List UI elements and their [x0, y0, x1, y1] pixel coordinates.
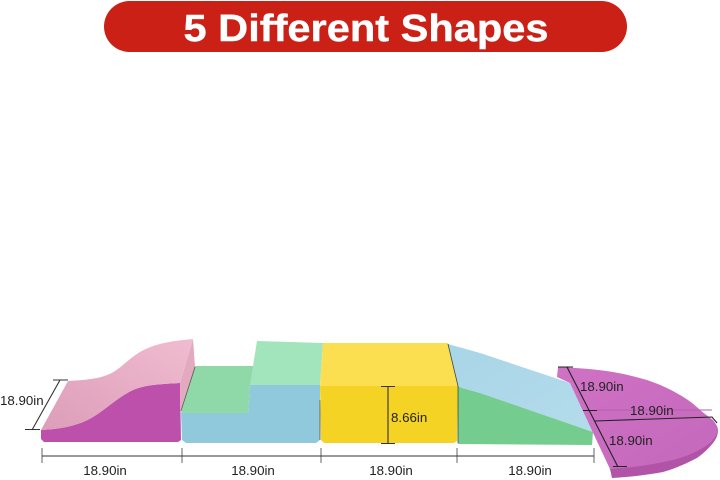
shape: yellow block — [320, 343, 458, 443]
shape: quarter circle mat — [557, 367, 718, 478]
dimension label: width 3: 18.90in — [369, 463, 413, 478]
dimension label: depth: 18.90in — [0, 393, 44, 408]
dimension label: lower radius: 18.90in — [609, 433, 653, 448]
shape: wave wedge — [41, 339, 195, 442]
dimension: block height — [381, 386, 427, 444]
dimension label: width 4: 18.90in — [508, 463, 552, 478]
dimension label: upper radius: 18.90in — [580, 379, 624, 394]
dimension: bottom widths — [42, 448, 594, 478]
dimension: left depth — [0, 380, 68, 430]
dimension label: width 1: 18.90in — [83, 463, 127, 478]
title banner — [104, 1, 627, 52]
dimension label: height: 8.66in — [391, 410, 427, 425]
title text: 5 Different Shapes — [184, 8, 548, 50]
shape: triangular wedge — [448, 344, 595, 445]
dimension label: width 2: 18.90in — [231, 463, 275, 478]
shape: two-step block — [181, 341, 323, 443]
dimensions: quarter circle — [558, 367, 717, 467]
dimension label: middle radius: 18.90in — [630, 403, 674, 418]
